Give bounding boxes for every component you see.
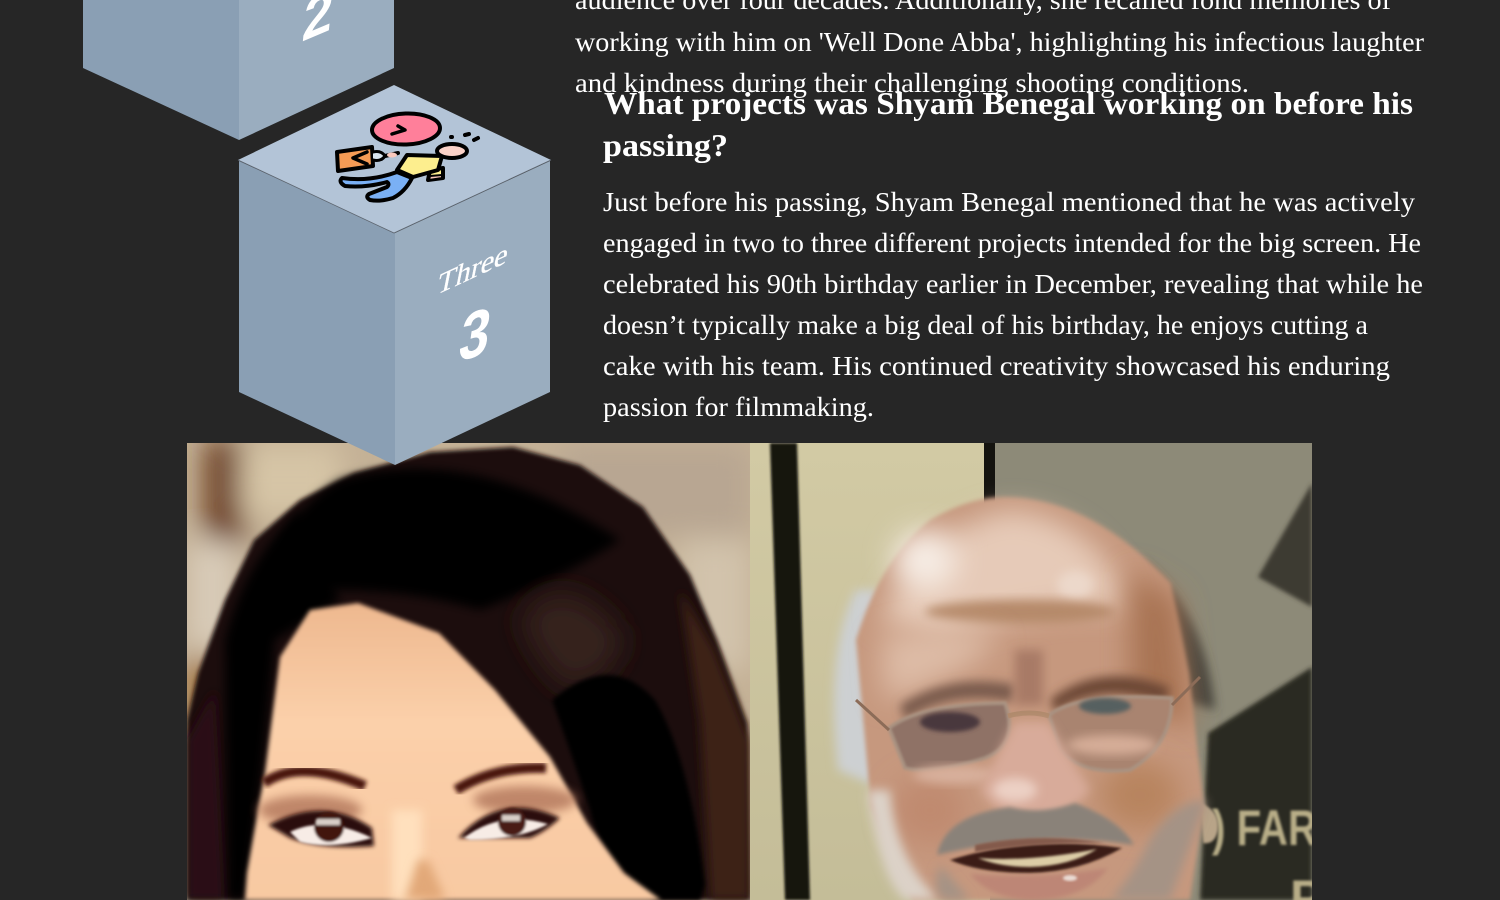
text: answer paragraph <box>603 187 1423 422</box>
glasses <box>889 703 1010 770</box>
eyebrows <box>264 771 365 786</box>
brow <box>900 681 1015 720</box>
poster shapes <box>1258 483 1312 607</box>
heading: question <box>603 85 1413 163</box>
text: answer paragraph: Just before his passing, Shyam Benegal mentioned that he was actively <box>603 187 1416 217</box>
text: answer paragraph: engaged in two to three different projects intended for the big screen. He <box>603 228 1421 258</box>
text: previous paragraph ending: and kindness during their challenging shooting conditions. <box>575 68 1249 98</box>
cheeks <box>898 785 963 840</box>
number 3: 3 <box>455 292 496 377</box>
poster text: ) FAR <box>1212 800 1317 856</box>
cube: step two <box>83 0 394 140</box>
text: answer paragraph: cake with his team. His continued creativity showcased his enduring <box>603 351 1390 381</box>
hair and head <box>834 590 885 790</box>
text: previous paragraph ending <box>575 0 1424 98</box>
hair <box>187 447 750 900</box>
photo: Shyam Benegal <box>750 443 1323 900</box>
heading: question: What projects was Shyam Benegal working on before his <box>604 85 1413 121</box>
icon: person running late with clock <box>337 112 478 201</box>
black lock <box>552 675 705 900</box>
mouth <box>950 844 1122 873</box>
text: answer paragraph: doesn’t typically make a big deal of his birthday, he enjoys cutting a <box>603 310 1368 340</box>
beard <box>867 790 940 900</box>
moustache <box>937 803 1134 855</box>
text: answer paragraph: passion for filmmaking. <box>603 392 874 422</box>
text: answer paragraph: celebrated his 90th birthday earlier in December, revealing that while he <box>603 269 1423 299</box>
text: previous paragraph ending: working with him on 'Well Done Abba', highlighting his infectious laughter <box>575 27 1424 57</box>
photo: woman with dark hair <box>187 440 750 900</box>
heading: question: passing? <box>603 127 728 163</box>
nose <box>980 722 1090 817</box>
label Three: Three <box>434 236 511 303</box>
eye shadow <box>258 795 362 825</box>
eyes <box>268 808 560 847</box>
face <box>245 603 661 900</box>
cube: step three <box>238 85 551 465</box>
